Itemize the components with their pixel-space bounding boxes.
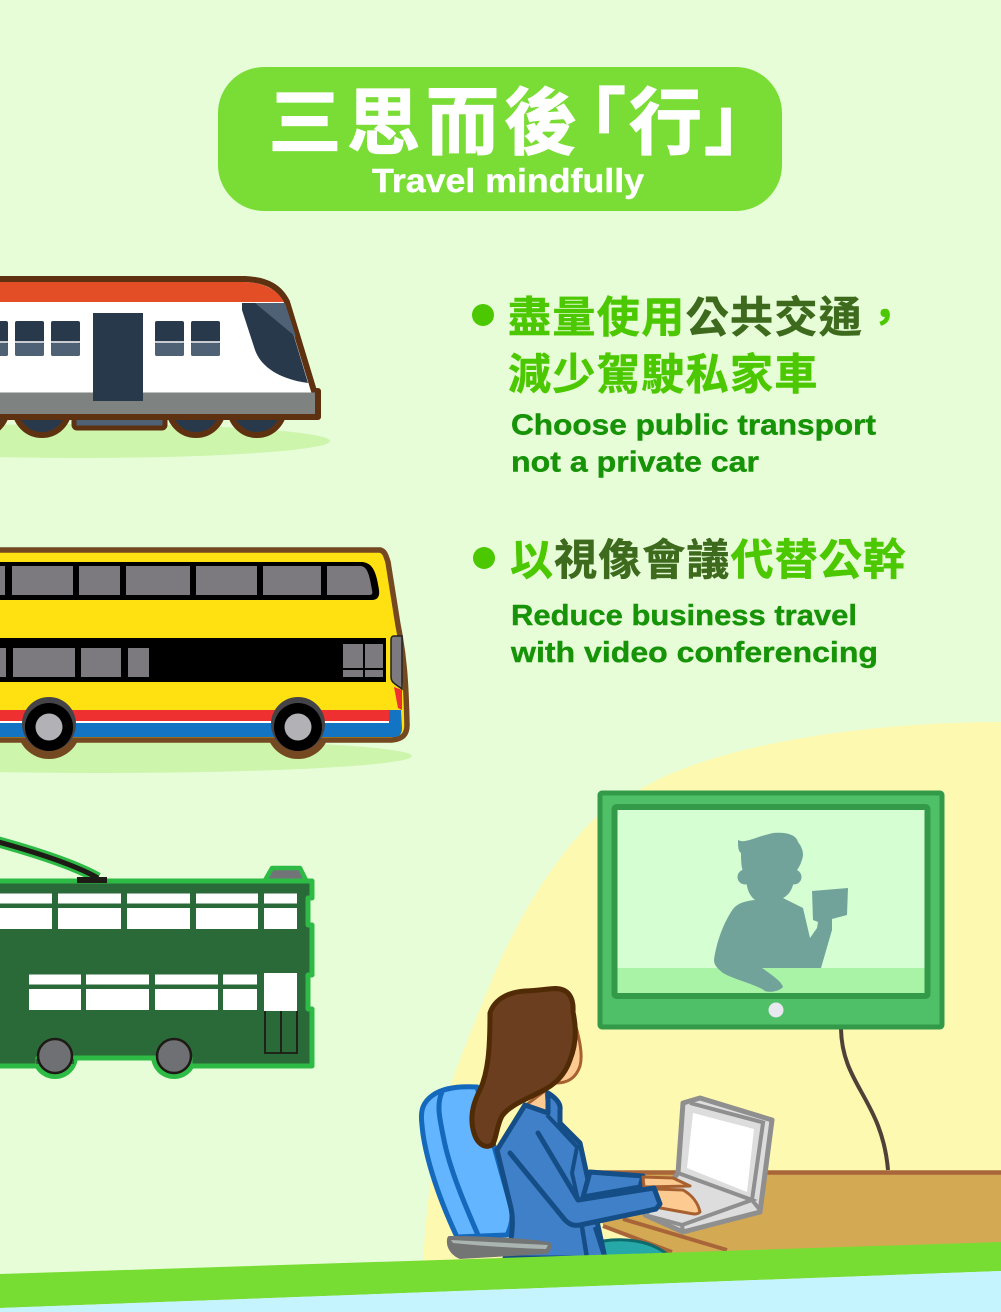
bullet: public transport [472,294,908,478]
bullet: video conferencing: with video conferencing [510,637,878,669]
bullet: public transport: 盡量使用公共交通， [508,294,908,342]
title pill: Travel mindfully [372,162,645,199]
title pill: 」 [704,83,777,164]
bullet: public transport: Choose public transport [511,410,876,442]
woman at laptop [421,1016,668,1259]
title pill: 三 [268,83,342,164]
office chair [421,1087,512,1237]
green bottom band [0,1242,1001,1308]
title pill: 思 [347,83,420,164]
bus [0,550,412,773]
bullet: public transport: 減少駕駛私家車 [508,352,819,400]
title pill: 而 [426,83,499,164]
laptop [645,1098,772,1232]
blue jacket [497,1093,605,1258]
near sleeve [510,1133,660,1225]
neck [526,1090,548,1113]
title pill: 「 [553,83,626,164]
bullet: video conferencing [473,537,907,669]
title pill: 後 [504,83,577,164]
face [530,1016,581,1083]
far sleeve [583,1172,643,1197]
title pill: 行 [629,83,702,164]
bullet: public transport: not a private car [511,446,759,478]
tram [0,841,312,1079]
yellow backdrop [423,722,1001,1262]
train [0,279,330,458]
pale blue footer [0,1271,1001,1312]
chair seat [447,1236,551,1259]
title pill [218,67,782,211]
hair [472,988,575,1146]
bullet: video conferencing: 以視像會議代替公幹 [510,537,907,585]
desk [590,1172,1001,1262]
bullet: video conferencing: Reduce business travel [511,600,857,632]
silhouette of remote colleague [714,833,848,992]
video screen [600,793,942,1027]
teal lower clothing [603,1240,668,1258]
near hand [655,1189,700,1214]
far hand [643,1177,690,1187]
cable [841,1029,888,1170]
